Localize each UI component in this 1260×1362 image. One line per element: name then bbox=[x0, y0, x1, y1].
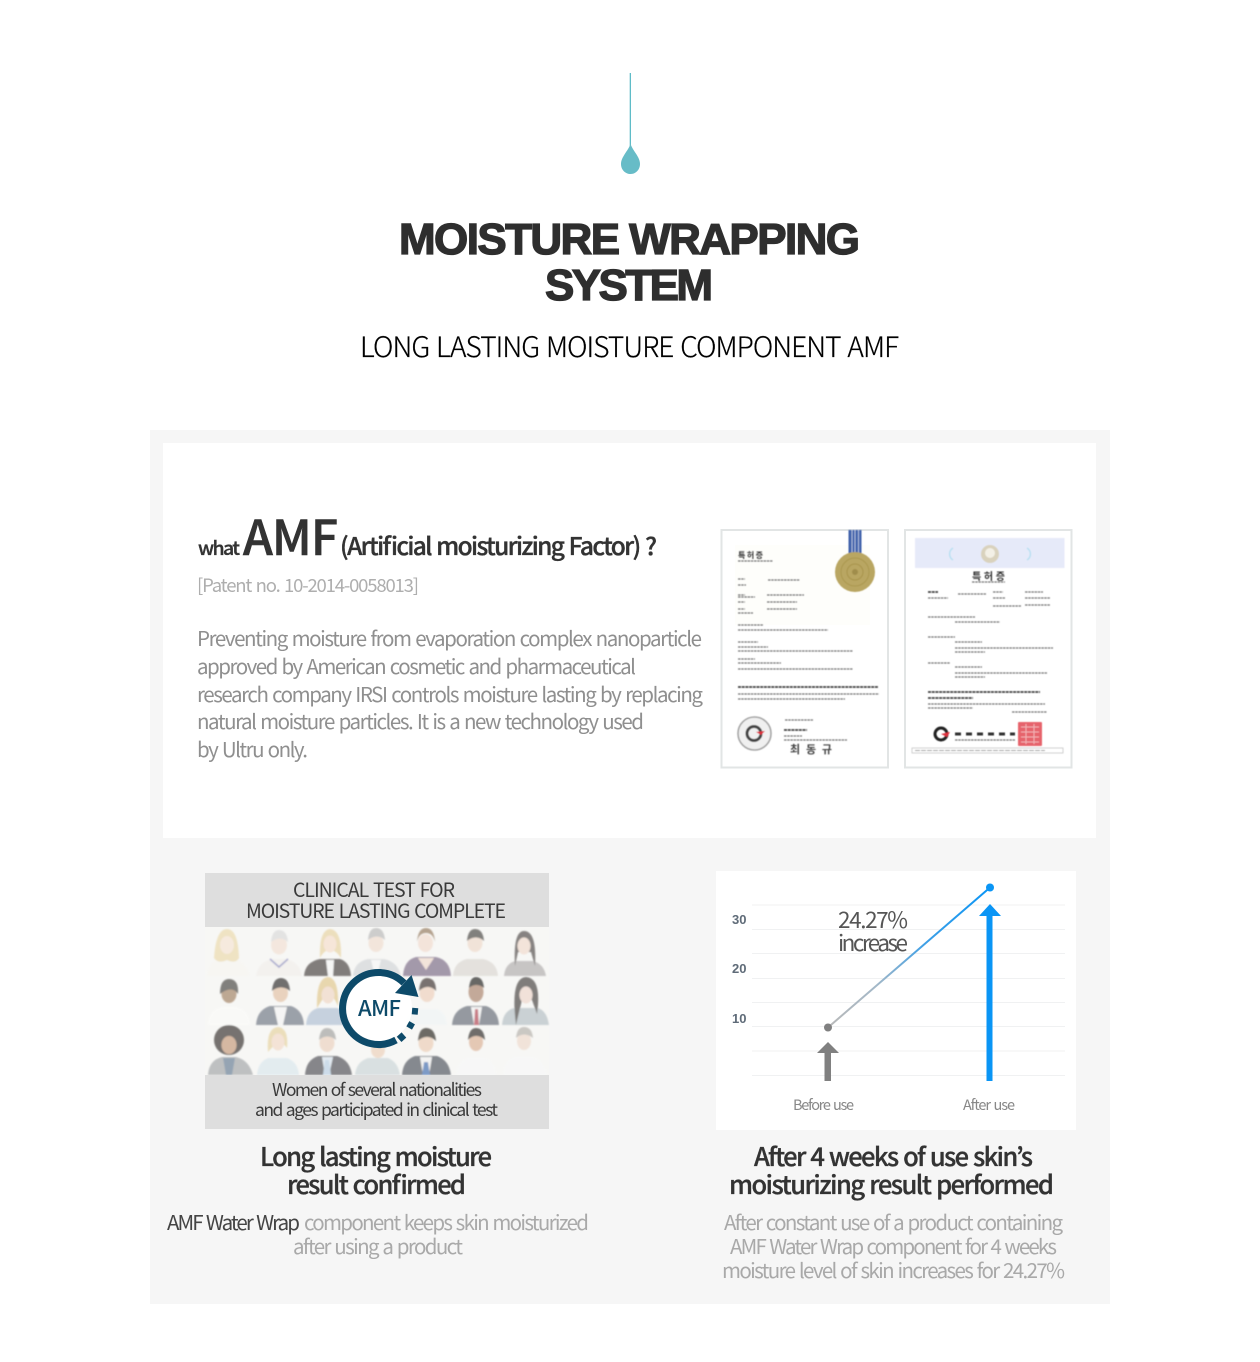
text: AMF water wrap note bbox=[167, 1206, 589, 1260]
text: result description: moisture level of skin increases for 24.27% bbox=[722, 1254, 1065, 1284]
arrow: after use bbox=[979, 904, 1001, 1081]
heading: after 4 weeks: moisturizing result performed bbox=[729, 1165, 1054, 1202]
heading: long lasting moisture: Long lasting moisture bbox=[260, 1137, 492, 1174]
panel: grey background bbox=[150, 430, 1110, 1304]
heading: what AMF: (Artificial moisturizing Factor) ? bbox=[340, 528, 657, 563]
text: result description: AMF Water Wrap component for 4 weeks bbox=[730, 1230, 1057, 1260]
patent certificate 1 bbox=[722, 530, 888, 768]
header band bbox=[915, 538, 1064, 568]
y axis labels bbox=[732, 912, 746, 1026]
callout: 24.27% increase bbox=[838, 903, 908, 958]
text: result description bbox=[722, 1206, 1065, 1284]
x axis labels bbox=[793, 1094, 1015, 1115]
header band bbox=[205, 873, 549, 927]
text: AMF water wrap note: after using a product bbox=[293, 1230, 463, 1260]
panel: clinical test card bbox=[205, 873, 549, 1129]
round office logo bbox=[738, 717, 771, 750]
ribbon bbox=[848, 530, 862, 554]
footer band: and ages participated in clinical test bbox=[255, 1097, 498, 1122]
title bbox=[399, 215, 860, 310]
heading: what AMF: AMF bbox=[243, 499, 338, 569]
red stamp bbox=[1018, 722, 1042, 746]
panel: moisture chart bbox=[716, 871, 1076, 1130]
callout: 24.27% increase: 24.27% bbox=[838, 903, 908, 935]
header band: CLINICAL TEST FOR bbox=[293, 874, 455, 903]
heading: after 4 weeks bbox=[729, 1137, 1054, 1202]
header band: MOISTURE LASTING COMPLETE bbox=[246, 895, 506, 924]
portrait grid bbox=[205, 927, 549, 1075]
gold seal bbox=[835, 552, 875, 592]
icon: water drop on line bbox=[621, 73, 640, 174]
y axis labels: 30 bbox=[732, 912, 746, 927]
text: AMF water wrap note: component keeps skin moisturized bbox=[304, 1206, 589, 1236]
description text bbox=[197, 622, 703, 763]
text: AMF water wrap note: AMF Water Wrap bbox=[167, 1206, 300, 1236]
panel: what is AMF bbox=[163, 443, 1096, 838]
government logo bbox=[935, 728, 950, 740]
row 1 people bbox=[207, 928, 546, 976]
heading: what AMF bbox=[198, 499, 657, 569]
description text: by Ultru only. bbox=[197, 733, 308, 763]
row 3 people bbox=[208, 1025, 547, 1075]
patent certificate 2 bbox=[905, 530, 1072, 768]
footer band bbox=[205, 1075, 549, 1129]
description text: Preventing moisture from evaporation complex nanoparticle bbox=[197, 622, 702, 652]
certificate title: 특허증 bbox=[972, 568, 1005, 583]
heading: what AMF: what bbox=[198, 532, 240, 561]
subtitle: LONG LASTING MOISTURE COMPONENT AMF bbox=[360, 326, 899, 366]
certificate title: 특허증 bbox=[738, 550, 764, 561]
description text: approved by American cosmetic and pharmaceutical bbox=[197, 650, 636, 680]
description text: research company IRSI controls moisture lasting by replacing bbox=[197, 678, 703, 708]
heading: long lasting moisture bbox=[260, 1137, 492, 1202]
x axis labels: After use bbox=[963, 1094, 1015, 1115]
row 2 people bbox=[208, 977, 549, 1025]
icon: AMF cycle arrow bbox=[343, 972, 418, 1044]
patent number: [Patent no. 10-2014-0058013] bbox=[197, 572, 419, 598]
trend line bbox=[824, 884, 994, 1032]
y axis labels: 10 bbox=[732, 1011, 746, 1026]
arrow: before use bbox=[817, 1042, 839, 1081]
heading: long lasting moisture: result confirmed bbox=[287, 1165, 466, 1202]
heading: after 4 weeks: After 4 weeks of use skin’s bbox=[754, 1137, 1033, 1174]
callout: 24.27% increase: increase bbox=[838, 926, 908, 958]
description text: natural moisture particles. It is a new technology used bbox=[197, 705, 644, 735]
footer band: Women of several nationalities bbox=[272, 1077, 482, 1102]
title: MOISTURE WRAPPING bbox=[399, 215, 860, 264]
x axis labels: Before use bbox=[793, 1094, 854, 1115]
title: SYSTEM bbox=[545, 261, 713, 310]
text: result description: After constant use of a product containing bbox=[724, 1206, 1063, 1236]
icon: AMF cycle arrow: AMF bbox=[358, 991, 401, 1023]
y axis labels: 20 bbox=[732, 961, 746, 976]
signature: 최 동 규 bbox=[790, 741, 832, 757]
